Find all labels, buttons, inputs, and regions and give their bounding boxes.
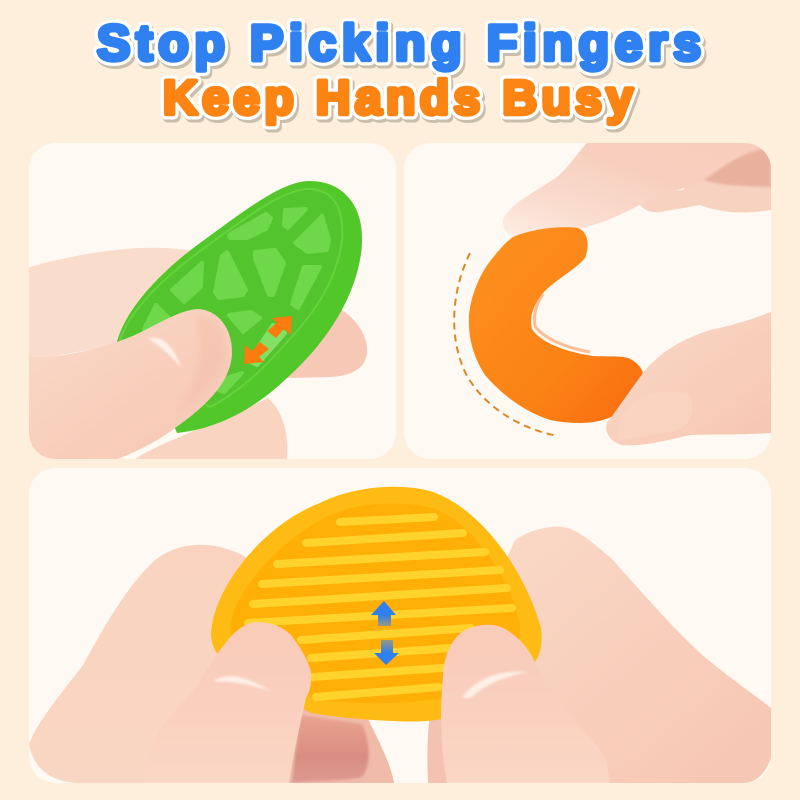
left knuckle crease	[213, 676, 272, 692]
panel: yellow squeeze toy	[29, 468, 771, 783]
lower finger	[135, 398, 287, 459]
dashed bend arc	[454, 253, 558, 436]
heading: Keep Hands Busy: Keep Hands Busy	[163, 72, 633, 125]
left back hand	[29, 545, 260, 783]
panel: orange bendable toy	[404, 143, 771, 459]
heading: Stop Picking Fingers: Stop Picking Fingers	[97, 15, 701, 71]
panel: green stretchy toy	[29, 143, 396, 459]
title	[97, 15, 703, 128]
squeeze arrows	[371, 601, 399, 665]
right back hand	[508, 526, 771, 783]
right thumb	[441, 625, 610, 783]
back finger shadow	[704, 148, 771, 187]
stretch arrows	[244, 316, 292, 364]
ribs	[248, 517, 512, 697]
thumb	[29, 309, 232, 459]
lower fingers behind toy	[289, 708, 394, 783]
thumb highlight	[148, 338, 181, 367]
inner ridges	[534, 294, 590, 352]
thumb tip shading	[198, 319, 222, 388]
top finger	[503, 143, 771, 238]
back knuckle finger	[640, 160, 771, 212]
bottom finger	[606, 312, 771, 445]
right lower finger	[427, 719, 447, 783]
heading: Stop Picking Fingers: Stop Picking Fingers	[99, 18, 703, 74]
green toy body	[117, 181, 362, 433]
heading: Keep Hands Busy: Keep Hands Busy	[163, 72, 633, 125]
yellow toy	[211, 487, 542, 722]
right knuckle crease	[462, 672, 528, 698]
orange toy	[469, 227, 643, 423]
heading: Keep Hands Busy: Keep Hands Busy	[165, 75, 635, 128]
darker finger shadow	[292, 715, 369, 783]
raised stones	[144, 209, 329, 392]
fingernail	[617, 392, 693, 440]
back finger	[29, 248, 190, 360]
right finger	[285, 309, 367, 378]
left thumb	[200, 622, 312, 783]
heading: Stop Picking Fingers: Stop Picking Fingers	[97, 15, 701, 71]
